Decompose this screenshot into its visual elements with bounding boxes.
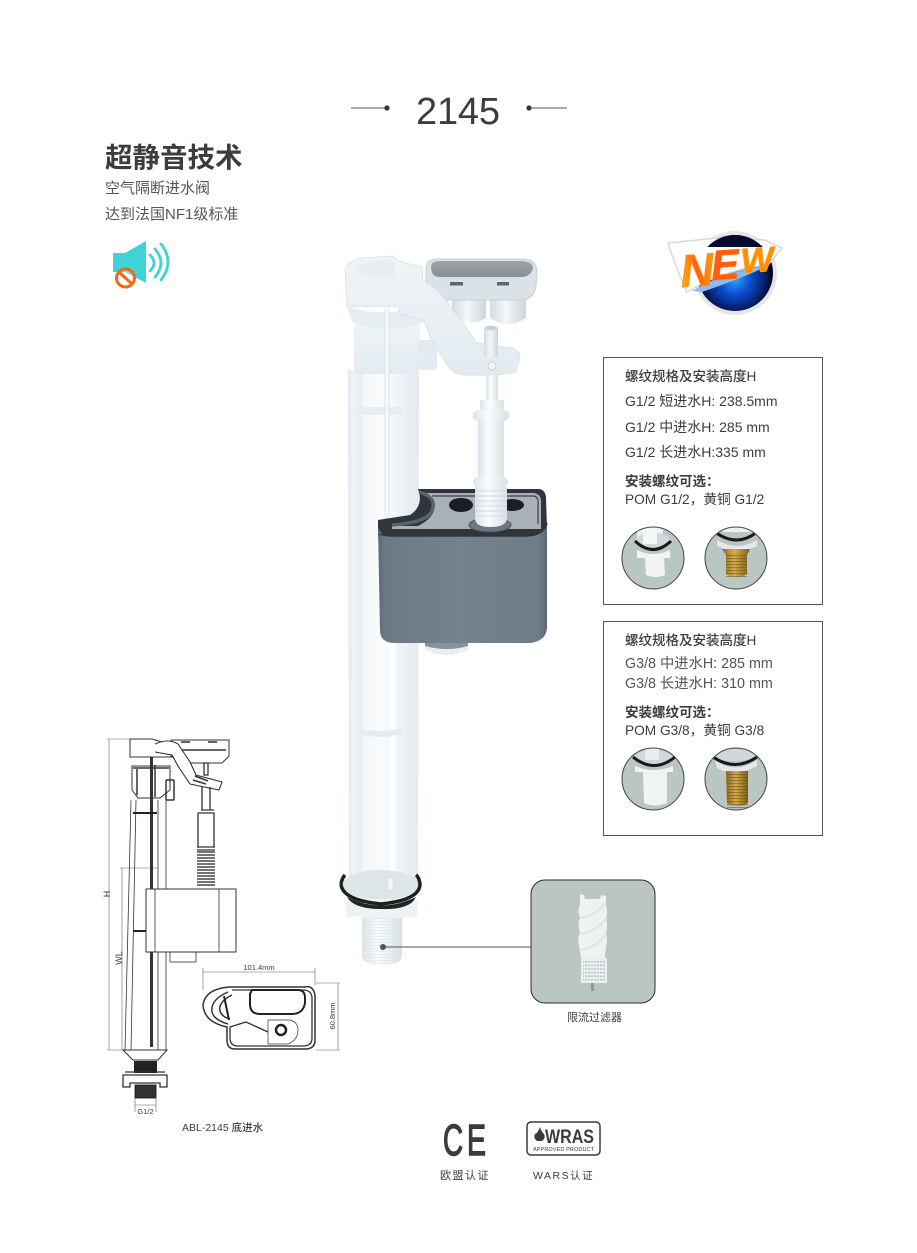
- collar: [354, 322, 420, 374]
- arm dark: [193, 776, 208, 784]
- icon: muted speaker: [113, 241, 168, 287]
- title: 2145: 2145: [416, 91, 500, 133]
- top cap: [130, 739, 172, 757]
- lower thread: [135, 1085, 156, 1098]
- panel: G1/2 spec: [604, 358, 822, 604]
- thumb: brass connector: [705, 526, 767, 589]
- small hole: [276, 1025, 286, 1035]
- side valve: [417, 340, 437, 370]
- lower tube rib: [358, 728, 402, 737]
- icon: spiral filter: [578, 894, 607, 991]
- icon: NEW badge: [668, 231, 782, 315]
- spec text: 螺纹规格及安装高度H: [625, 369, 756, 384]
- base plate: [343, 870, 419, 900]
- gasket ring: [341, 875, 420, 904]
- valve stem: [473, 375, 509, 487]
- nut: [123, 1072, 167, 1087]
- logo: WRAS: [527, 1122, 600, 1155]
- float head: [171, 740, 229, 763]
- rod cross ties: [133, 813, 157, 931]
- label: G1/2: G1/2: [137, 1107, 154, 1116]
- title: 2145: [351, 91, 567, 133]
- label: 60.8mm: 60.8mm: [328, 1002, 337, 1030]
- label: WRAS: WARS认证: [533, 1169, 594, 1182]
- float box: [378, 489, 547, 655]
- subtitle: APPROVED PRODUCT: [533, 1147, 595, 1153]
- outline: [203, 987, 315, 1049]
- float rod: [385, 306, 389, 518]
- text block: feature description: 达到法国NF1级标准: [105, 206, 238, 223]
- stem: [201, 763, 214, 810]
- large opening: [250, 990, 305, 1014]
- label: 101.4mm: 101.4mm: [243, 963, 275, 972]
- text block: feature description: 空气隔断进水阀: [105, 180, 210, 197]
- tray rim: [378, 489, 547, 537]
- logo mark: [224, 996, 229, 1020]
- inlet thread: [362, 918, 402, 965]
- spec text: 安装螺纹可选：: [625, 473, 720, 489]
- bellows: [197, 852, 215, 885]
- stem pin: [484, 327, 498, 357]
- main tube: [348, 370, 419, 878]
- centre rod: [150, 753, 153, 1047]
- label: H: H: [102, 891, 112, 897]
- inner outline: [230, 990, 312, 1046]
- product: fill valve: [341, 256, 547, 965]
- label: CE: 欧盟认证: [440, 1169, 490, 1182]
- cap inner highlight: [356, 260, 396, 278]
- arc duct: [392, 492, 433, 525]
- G1/2 dimension: [135, 1098, 156, 1112]
- spec text: G1/2 长进水H:335 mm: [625, 444, 766, 460]
- flange: [345, 899, 418, 921]
- tray inner line: [432, 496, 538, 524]
- thumb rims: [622, 748, 767, 810]
- spec text: 螺纹规格及安装高度H: [625, 633, 756, 648]
- arc duct: [212, 992, 232, 1024]
- callout line to filter: [380, 944, 531, 950]
- valve cup: [132, 766, 170, 798]
- spec text: POM G3/8，黄铜 G3/8: [625, 723, 765, 738]
- icon: NEW badge: W: [739, 240, 778, 281]
- tube rib: [354, 407, 404, 415]
- icon: NEW badge: N: [679, 243, 716, 297]
- hole right: [500, 499, 524, 511]
- float box: [146, 889, 236, 952]
- spec text: G1/2 中进水H: 285 mm: [625, 419, 770, 435]
- logo: CE: E: [467, 1116, 486, 1165]
- stem screw head detail: [485, 326, 497, 330]
- lower gasket: [347, 897, 416, 909]
- cone: [123, 1050, 167, 1060]
- thumb: brass connector: [705, 748, 767, 810]
- dimensions: [203, 968, 340, 1050]
- hole left: [449, 498, 473, 512]
- heading: 超静音技术: 超静音技术: [105, 142, 242, 173]
- float head top: [426, 259, 537, 324]
- tray floor: [392, 493, 541, 529]
- thumb: POM connector: [622, 526, 684, 589]
- spec text: G3/8 长进水H: 310 mm: [625, 675, 773, 692]
- logo: CE: C: [443, 1116, 463, 1165]
- front top edge: [380, 523, 547, 536]
- spec text: [625, 633, 773, 738]
- label: WL: WL: [114, 951, 124, 965]
- spec text: POM G1/2，黄铜 G1/2: [625, 492, 764, 507]
- box folds: [155, 889, 219, 952]
- dimension lines: [107, 739, 158, 1050]
- collar ring: [347, 306, 424, 329]
- tube outline: [125, 800, 166, 1050]
- technical drawing: top view: [203, 963, 340, 1050]
- bellows: [469, 487, 511, 532]
- lever holes: [488, 362, 496, 370]
- arm: [155, 741, 222, 790]
- bottom outlet: [170, 952, 196, 962]
- rod lower: [388, 878, 393, 890]
- spec text: G1/2 短进水H: 238.5mm: [625, 393, 778, 409]
- upper float tube: [197, 813, 215, 850]
- spec text: 安装螺纹可选：: [625, 704, 720, 720]
- panel: flow-limit filter: [531, 880, 655, 1003]
- spec text: [625, 369, 778, 507]
- thumb: POM connector: [622, 748, 684, 810]
- technical drawing: side view: [102, 739, 236, 1116]
- spec text: G3/8 中进水H: 285 mm: [625, 655, 773, 672]
- text block: feature description: [105, 180, 238, 223]
- label: filter: 限流过滤器: [567, 1010, 622, 1024]
- outlet: [425, 640, 468, 655]
- wordmark: WRAS: [545, 1127, 594, 1148]
- head detail: [176, 742, 226, 750]
- threaded inlet: [362, 918, 402, 965]
- panel: G3/8 spec: [604, 622, 822, 836]
- cup dark inner: [133, 765, 169, 797]
- small hole surround: [268, 1020, 298, 1044]
- icon: flame drop: [534, 1127, 545, 1141]
- thread: [134, 1061, 157, 1073]
- tube centre highlight: [388, 640, 397, 880]
- icon: NEW badge: E: [709, 240, 743, 289]
- side valve: [166, 780, 174, 800]
- caption: model: ABL-2145 底进水: [182, 1121, 264, 1134]
- front face: [378, 523, 547, 643]
- thumb rims: [622, 527, 767, 589]
- cap and arm: [345, 256, 520, 375]
